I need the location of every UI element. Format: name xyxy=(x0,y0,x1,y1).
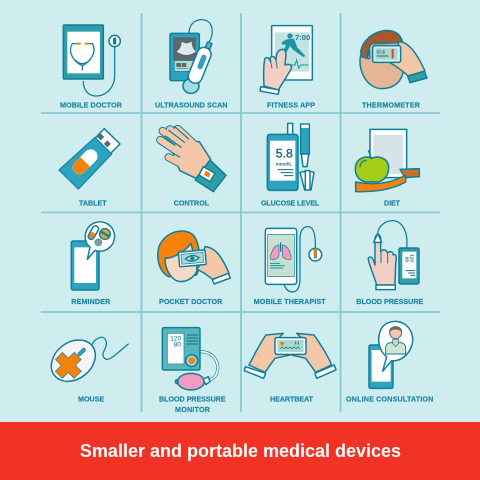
icon: blood pressure finger sensor: 80 xyxy=(404,257,410,262)
label: heartbeat: HEARTBEAT xyxy=(270,395,314,404)
icon: fitness app: 7:00 xyxy=(295,33,310,42)
label: pocket doctor: POCKET DOCTOR xyxy=(159,297,223,306)
icon: online consultation xyxy=(369,321,413,388)
label: blood pressure monitor: MONITOR xyxy=(175,405,211,414)
icon: mouse with cross xyxy=(43,331,128,390)
icon: pocket doctor xyxy=(158,231,230,284)
banner xyxy=(0,422,480,480)
icon: blood pressure monitor: 80 xyxy=(174,342,181,349)
label: mobile therapist: MOBILE THERAPIST xyxy=(254,297,326,306)
label: fitness app: FITNESS APP xyxy=(267,100,315,110)
icon: glucose level meter xyxy=(267,123,314,190)
icon: fitness app xyxy=(260,26,312,94)
label: thermometer: THERMOMETER xyxy=(362,100,421,110)
icon: mobile therapist xyxy=(265,227,322,292)
label: mobile doctor: MOBILE DOCTOR xyxy=(60,100,123,110)
label: blood pressure monitor: BLOOD PRESSURE xyxy=(159,395,226,404)
label: diet: DIET xyxy=(384,198,401,207)
icon: control hand with wristband xyxy=(160,126,226,192)
icon: ultrasound scan xyxy=(170,20,213,93)
icon: reminder phone with pills xyxy=(71,222,115,290)
banner title: Smaller and portable medical devices xyxy=(80,441,401,461)
icon: glucose level meter: mmol/L xyxy=(276,161,292,166)
icon: heartbeat smartphone in hands xyxy=(244,333,336,378)
icon: glucose level meter: 5.8 xyxy=(276,147,293,161)
icon: blood pressure finger sensor: 120 xyxy=(409,254,415,263)
label: mouse: MOUSE xyxy=(78,395,105,404)
label: online consultation: ONLINE CONSULTATION xyxy=(346,395,433,404)
icon: tablet usb pill xyxy=(59,129,120,189)
icon: blood pressure monitor xyxy=(162,328,218,390)
label: ultrasound scan: ULTRASOUND SCAN xyxy=(155,100,228,110)
label: control: CONTROL xyxy=(174,198,210,207)
icon: thermometer xyxy=(360,31,427,89)
label: blood pressure monitor xyxy=(159,395,226,414)
label: glucose level: GLUCOSE LEVEL xyxy=(261,198,320,207)
label: blood pressure: BLOOD PRESSURE xyxy=(356,297,424,306)
icon: blood pressure monitor: 120 xyxy=(170,336,182,343)
icon: blood pressure finger sensor xyxy=(368,221,419,290)
icon: thermometer: 37.8 xyxy=(376,49,385,54)
label: reminder: REMINDER xyxy=(71,297,111,306)
icon: diet tablet and apple xyxy=(355,129,419,192)
label: tablet: TABLET xyxy=(79,198,107,207)
icon: mobile doctor xyxy=(63,25,120,96)
